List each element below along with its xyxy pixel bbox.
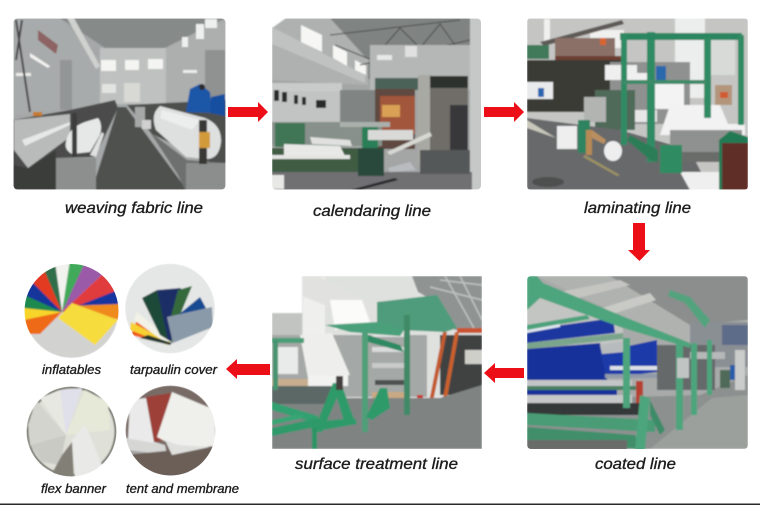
label: flex banner: flex banner	[41, 482, 107, 496]
panel: laminating line photo	[527, 18, 748, 190]
arrow: coated to surface treatment	[484, 363, 524, 383]
arrow: calendaring to laminating	[484, 102, 524, 122]
icon: tarpaulin cover swatch fan	[125, 264, 215, 354]
arrow: laminating to coated	[628, 223, 650, 261]
icon: tent and membrane swatch fan	[125, 386, 216, 480]
panel: weaving fabric line photo	[13, 18, 226, 190]
heading: laminating line: laminating line	[584, 200, 691, 217]
icon: flex banner swatch fan	[26, 386, 116, 477]
panel: coated line photo	[527, 276, 748, 450]
label: tent and membrane: tent and membrane	[126, 482, 239, 496]
heading: coated line: coated line	[595, 456, 676, 473]
arrow: surface treatment to products	[226, 359, 270, 379]
label: inflatables: inflatables	[42, 363, 101, 377]
arrow: weaving to calendaring	[228, 102, 268, 122]
heading: weaving fabric line: weaving fabric line	[65, 200, 203, 217]
icon: inflatables colour swatch fan	[24, 260, 120, 358]
panel: calendaring line photo	[272, 18, 482, 190]
heading: surface treatment line: surface treatment line	[295, 456, 458, 473]
panel: surface treatment line photo	[272, 276, 482, 449]
heading: calendaring line: calendaring line	[313, 203, 431, 220]
label: tarpaulin cover: tarpaulin cover	[130, 363, 218, 377]
